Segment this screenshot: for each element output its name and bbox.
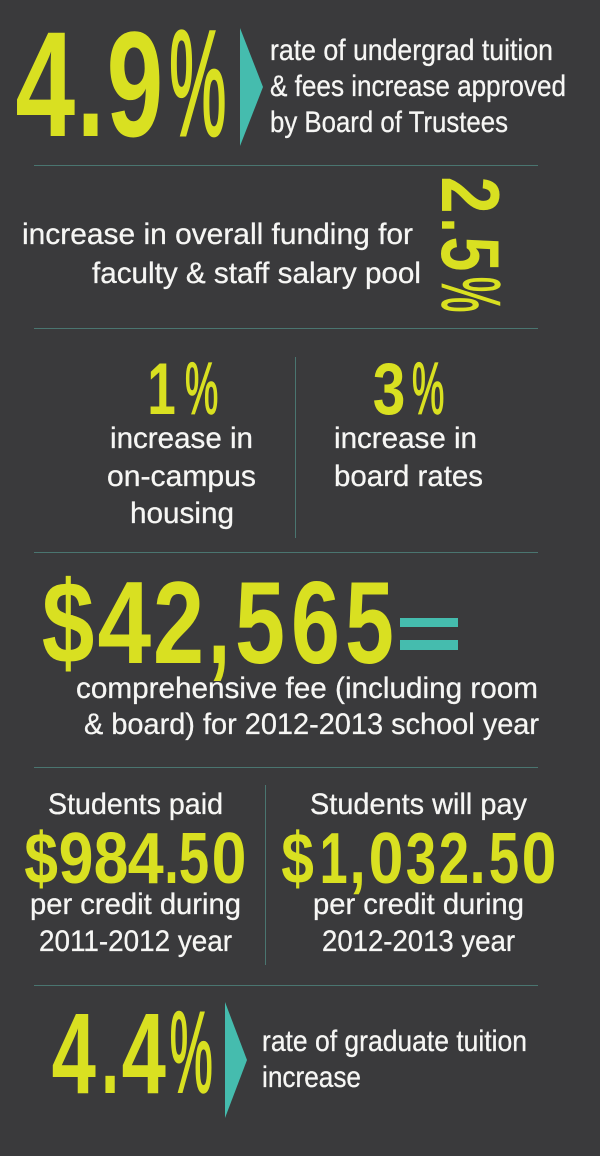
icon: teal arrow: [240, 28, 263, 146]
stat: $984.50: 5: [179, 819, 209, 899]
text: salary description: increase in overall funding for: [22, 218, 413, 251]
text: housing description: increase in: [110, 422, 253, 455]
stat: 2.5% rotated: 5: [424, 237, 517, 271]
panel: comprehensive fee: [42, 557, 539, 741]
stat: 2.5% rotated: 2: [424, 176, 517, 214]
text: fee description: [76, 672, 539, 741]
panel: housing and board: [107, 348, 483, 530]
stat: $984.50: [24, 819, 246, 899]
stat: 2.5% rotated: .: [424, 218, 517, 232]
icon: teal arrow: [225, 1002, 247, 1118]
stat: $42,565: ,: [208, 557, 230, 688]
stat: 4.9%: [15, 0, 226, 168]
stat: 1%: 1: [147, 349, 176, 430]
panel: 4.4% graduate tuition: [52, 989, 527, 1118]
stat: $984.50: 4: [128, 819, 164, 899]
text: housing description: [107, 422, 256, 530]
icon: teal equals sign: [400, 618, 458, 650]
panel: 4.9% undergrad tuition: %: [169, 0, 226, 167]
stat: $984.50: .: [164, 819, 179, 899]
panel: housing and board: %: [412, 348, 444, 430]
stat: $1,032.50: 1: [320, 819, 348, 899]
stat: $42,565: [42, 557, 394, 688]
panel: per-credit 2012-2013: [281, 788, 556, 958]
text: graduate description: [262, 1025, 527, 1094]
stat: $42,565: 5: [345, 557, 394, 688]
text: per credit 2012-2013: [313, 888, 524, 958]
text: per credit 2012-2013: 2012-2013 year: [322, 925, 515, 958]
text: salary description: [22, 218, 421, 290]
text: tuition description: by Board of Trustees: [270, 106, 508, 139]
text: fee description: comprehensive fee (including room: [76, 672, 538, 705]
stat: 4.9%: 9: [107, 0, 163, 168]
text: per credit 2011-2012: [30, 888, 241, 958]
stat: 1%: %: [185, 348, 218, 430]
text: housing description: housing: [130, 497, 234, 530]
stat: 4.9%: .: [77, 0, 104, 168]
stat: $1,032.50: .: [469, 819, 486, 899]
text: salary description: faculty & staff salary pool: [92, 257, 421, 290]
text: students paid: Students paid: [48, 788, 223, 821]
text: per credit 2011-2012: 2011-2012 year: [39, 925, 232, 958]
stat: $42,565: 4: [98, 557, 151, 688]
stat: $1,032.50: 5: [489, 819, 519, 899]
text: board description: board rates: [334, 460, 483, 493]
stat: $1,032.50: 0: [522, 819, 556, 899]
text: fee description: & board) for 2012-2013 school year: [84, 708, 539, 741]
panel: per-credit 2011-2012: [24, 788, 246, 958]
panel: 4.4% graduate tuition: %: [170, 989, 213, 1117]
stat: 2.5% rotated: [424, 176, 518, 312]
stat: $42,565: 6: [291, 557, 340, 688]
stat: $1,032.50: 0: [369, 819, 403, 899]
text: board description: [334, 422, 483, 493]
text: students will pay: Students will pay: [310, 788, 527, 821]
stat: 4.4%: .: [101, 990, 119, 1118]
text: graduate description: rate of graduate tuition: [262, 1025, 527, 1058]
stat: 4.4%: 4: [52, 990, 96, 1118]
stat: 3%: [373, 348, 444, 430]
stat: $1,032.50: [281, 819, 556, 899]
stat: $42,565: 2: [153, 557, 204, 688]
stat: $984.50: $: [24, 819, 58, 899]
stat: $1,032.50: ,: [349, 819, 366, 899]
text: tuition description: rate of undergrad tuition: [270, 34, 553, 67]
stat: 4.4%: 4: [122, 990, 166, 1118]
text: tuition description: [270, 34, 566, 139]
stat: 4.9%: 4: [15, 0, 75, 168]
text: per credit 2011-2012: per credit during: [30, 888, 241, 921]
text: board description: increase in: [334, 422, 477, 455]
stat: $984.50: 0: [212, 819, 246, 899]
stat: 1%: [147, 348, 218, 430]
text: housing description: on-campus: [107, 460, 256, 493]
panel: 4.9% undergrad tuition: [15, 0, 566, 168]
stat: 4.4%: [52, 989, 213, 1118]
stat: $1,032.50: $: [281, 819, 314, 899]
stat: $42,565: 5: [235, 557, 285, 688]
stat: $984.50: 8: [94, 819, 128, 899]
text: per credit 2012-2013: per credit during: [313, 888, 524, 921]
text: graduate description: increase: [262, 1061, 361, 1094]
stat: $1,032.50: 2: [439, 819, 469, 899]
stat: $984.50: 9: [59, 819, 93, 899]
stat: $1,032.50: 3: [406, 819, 436, 899]
stat: $42,565: $: [42, 557, 94, 688]
stat: 3%: 3: [373, 349, 405, 430]
panel: 2.5% salary pool: [22, 176, 518, 312]
text: %: [424, 277, 518, 312]
